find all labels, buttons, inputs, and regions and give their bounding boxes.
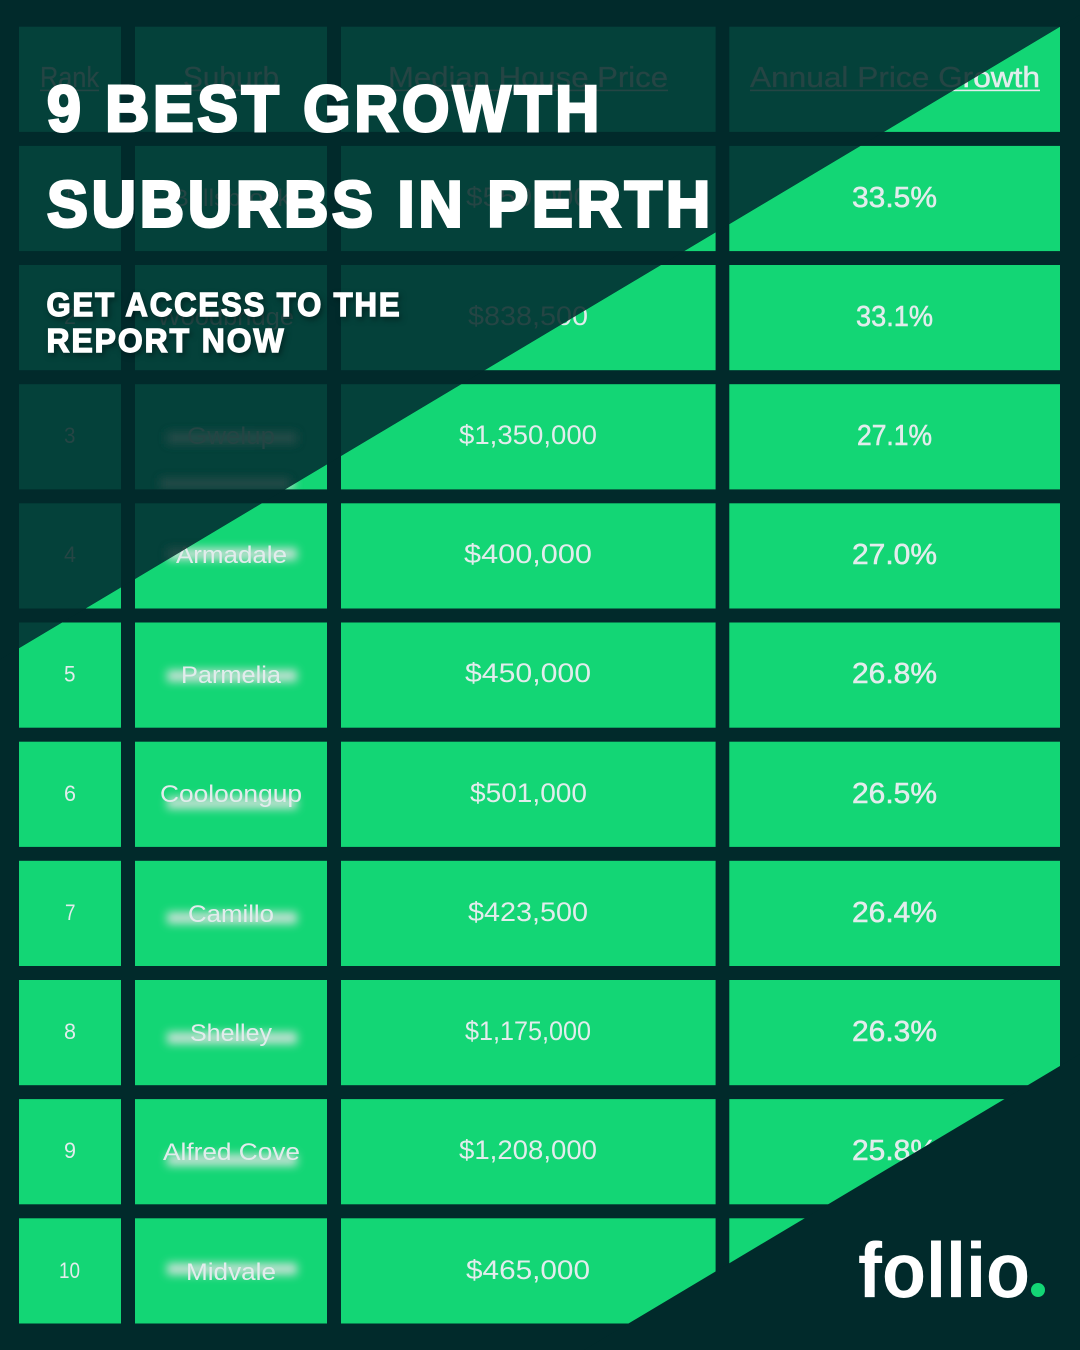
row 5: Parmelia [181,662,282,689]
row 9: 9 [64,1138,76,1163]
row 2: $838,500 [468,301,588,331]
dark row 1: 1 [64,185,73,210]
row 1 [19,146,1060,251]
row 7: Camillo [188,901,274,928]
row 6: Cooloongup [160,781,302,808]
row 9: Alfred Cove [163,1139,300,1166]
row 3: 27.1% [857,420,932,452]
bottom-right dark triangle [584,1054,1080,1350]
row 7 [19,861,1060,966]
dark row 4: Armadale [176,542,287,569]
subtitle [46,286,402,359]
row 4: 27.0% [852,539,937,571]
row 2: 33.1% [856,301,933,333]
dark row 1 [19,146,860,251]
green header row [19,27,1060,132]
row 7: 26.4% [852,897,937,929]
row 1: 33.5% [852,182,937,214]
row 3: $1,350,000 [459,420,597,450]
title: SUBURBS IN PERTH [47,168,714,240]
row 6: 6 [64,781,76,806]
row 5: 26.8% [852,658,937,690]
row 5: $450,000 [465,658,591,688]
row 8: 8 [64,1019,76,1044]
row 3 [285,384,1060,490]
row 8: Shelley [190,1020,272,1047]
dark row 3: 3 [64,423,76,448]
dark row 1: $550,000 [466,182,590,212]
row 6 [19,742,1060,847]
row 5: 5 [64,662,76,686]
row 9: 25.8% [852,1135,937,1167]
dark header row [19,27,1060,132]
row 8: $1,175,000 [465,1016,591,1046]
row 6: $501,000 [470,778,587,808]
dark header row: Median House Price [388,62,668,94]
dark row 4 [19,503,262,608]
dark header row: Annual Price Growth [750,62,1040,94]
dark header row: Rank [40,62,99,94]
dark row 5 corner [19,622,62,648]
subtitle: REPORT NOW [46,322,286,359]
row 4: Armadale [176,542,287,569]
green header row: Annual Price Growth [750,62,1040,94]
dark header row: Suburb [183,62,279,94]
subtitle: GET ACCESS TO THE [46,286,402,323]
row 7: 7 [65,900,76,925]
row 9: $1,208,000 [459,1135,597,1165]
row 8: 26.3% [852,1016,937,1048]
row 9 [19,1099,1060,1204]
row 2 [19,265,1060,370]
dark row 1: Bullsbrook [172,185,291,212]
row 8 [19,980,1060,1085]
dark diagonal table layer [19,26,1060,648]
title: 9 BEST GROWTH [47,72,603,145]
dark row 2: $838,500 [468,301,588,331]
dark layer background [0,0,1080,660]
dark row 2 [19,265,661,370]
dark row 2: Woodbridge [157,304,294,331]
row 6: 26.5% [852,778,937,810]
row 10: 10 [59,1258,80,1283]
row 10 [19,1218,1060,1324]
row 4 [19,503,1060,608]
follio logo: follio [858,1226,1030,1314]
title [47,72,714,240]
row 10: $465,000 [466,1255,590,1285]
dark row 4: 4 [64,542,76,567]
row 5 [19,622,1060,728]
row 4: $400,000 [464,539,592,569]
dark row 2: 2 [64,304,76,329]
dark row 3 [19,384,462,490]
row 7: $423,500 [468,897,588,927]
dark row 3: Gwelup [187,423,275,450]
row 10: Midvale [186,1259,276,1286]
